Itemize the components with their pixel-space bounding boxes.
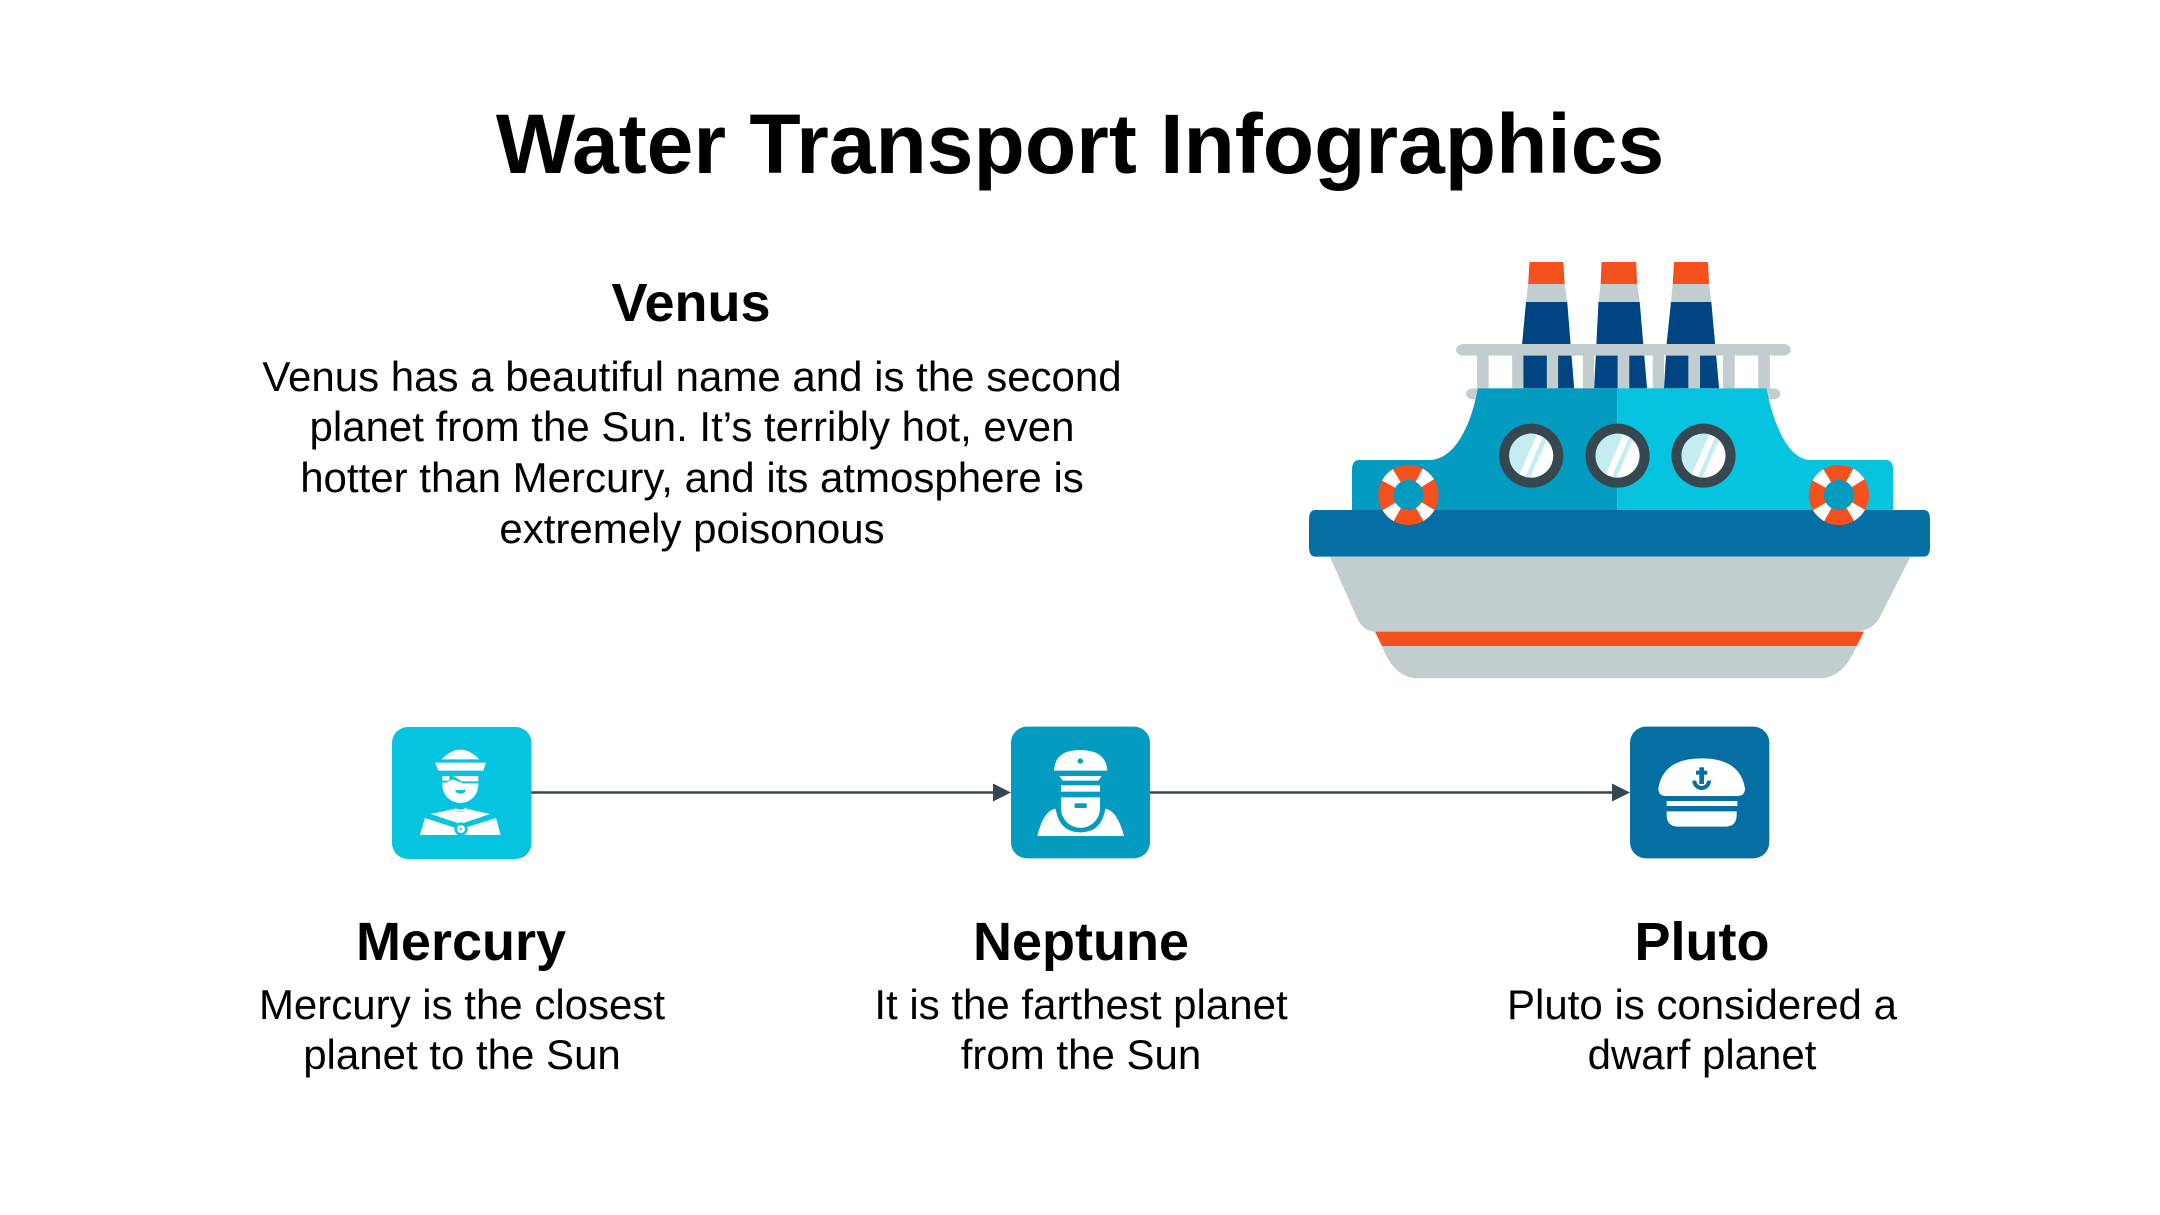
funnels [1522,262,1719,388]
arrow: Mercury to Neptune [531,784,1011,802]
body: Venus description: extremely poisonous [499,505,885,552]
hull [1330,557,1911,678]
deck [1309,510,1930,557]
lifebuoys [1378,465,1869,525]
portholes [1499,424,1736,488]
text block: Venus [262,273,1122,552]
text block: Pluto: Pluto [1635,912,1769,972]
body: Venus description [262,353,1122,552]
body: Venus description: hotter than Mercury, and its atmosphere is [300,454,1084,501]
icon: captain with moustache [1011,727,1150,858]
title: Water Transport Infographics [496,97,1664,191]
text block: Mercury: planet to the Sun [303,1031,621,1078]
illustration: ship [1309,262,1930,678]
cabin [1352,388,1893,512]
heading: Venus: Venus [611,273,771,333]
text block: Pluto: dwarf planet [1588,1031,1817,1078]
text block: Mercury: Mercury [356,912,566,972]
text block: Mercury: Mercury is the closest [259,981,665,1028]
text block: Neptune: from the Sun [961,1031,1201,1078]
body: Venus description: Venus has a beautiful name and is the second [262,353,1122,400]
icon: captain hat with anchor [1630,727,1769,858]
icon: sailor with sunglasses [392,727,532,859]
text block: Neptune: Neptune [973,912,1189,972]
text block: Pluto: Pluto is considered a [1507,981,1898,1028]
body: Venus description: planet from the Sun. It’s terribly hot, even [310,403,1074,450]
text block: Neptune [874,912,1288,1078]
text block: Neptune: It is the farthest planet [874,981,1288,1028]
text block: Mercury [259,912,665,1078]
arrow: Neptune to Pluto [1150,784,1630,802]
text block: Pluto [1507,912,1898,1078]
railing [1456,344,1791,399]
